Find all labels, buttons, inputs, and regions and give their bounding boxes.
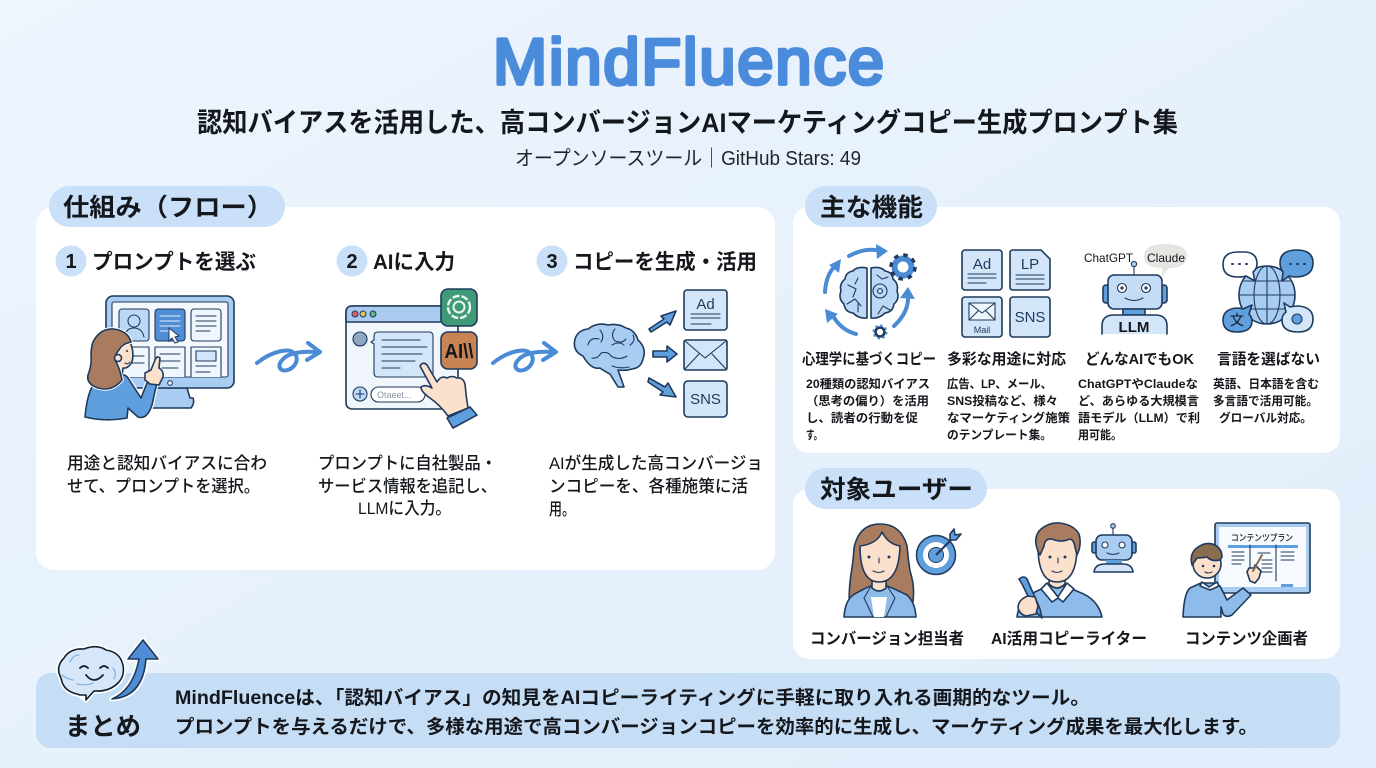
icon: planner with board: [1183, 523, 1310, 617]
icon: marketing documents: [962, 250, 1050, 337]
step 2 description: [318, 454, 497, 518]
feature 2 description: のテンプレート集。: [947, 427, 1052, 442]
step 2 heading: [336, 246, 455, 276]
summary text: [175, 686, 1258, 738]
summary label: まとめ: [65, 713, 141, 741]
feature 4 description: [1213, 376, 1319, 425]
feature 4 description: グローバル対応。: [1219, 410, 1312, 425]
step 3 description: AIが生成した高コンバージョ: [549, 453, 763, 473]
icon: AI chat window: AI\\: [444, 341, 474, 363]
heading: features: [805, 186, 937, 227]
icon: planner with board: コンテンツプラン: [1231, 533, 1293, 543]
step 3 description: 用。: [549, 500, 575, 519]
heading: flow: [49, 186, 285, 227]
feature 2 description: SNS投稿など、様々: [947, 393, 1058, 408]
icon: LLM robot: [1084, 244, 1187, 336]
icon: brain with arrow: [59, 640, 158, 700]
step 3 heading: コピーを生成・活用: [573, 250, 757, 274]
step 3 heading: 3: [546, 251, 558, 273]
feature 2 description: なマーケティング施策: [947, 410, 1070, 425]
icon: brain with outputs: Ad: [696, 296, 715, 313]
step 2 heading: 2: [346, 251, 358, 273]
feature 3 description: ど、あらゆる大規模言: [1078, 393, 1199, 408]
feature 3 description: ChatGPTやClaudeな: [1078, 377, 1198, 391]
title: MindFluence: [493, 25, 884, 98]
step 1 description: せて、プロンプトを選択。: [67, 477, 260, 496]
icon: marketing documents: Mail: [974, 325, 990, 335]
heading: target users: [805, 468, 987, 509]
tagline: オープンソースツール｜GitHub Stars: 49: [515, 147, 861, 170]
feature 1 description: （思考の偏り）を活用: [806, 393, 929, 408]
feature 1 description: す。: [806, 428, 822, 442]
icon: globe with speech bubbles: [1223, 250, 1313, 332]
feature 3 description: [1078, 377, 1200, 442]
step 1 heading: [56, 246, 256, 276]
step 3 description: ンコピーを、各種施策に活: [549, 477, 748, 496]
feature 2 title: 多彩な用途に対応: [947, 350, 1066, 368]
feature 1 description: し、読者の行動を促: [806, 410, 918, 425]
step 1 description: 用途と認知バイアスに合わ: [67, 454, 267, 473]
step 1 heading: 1: [65, 251, 77, 273]
feature 4 description: 多言語で活用可能。: [1213, 393, 1318, 408]
feature 1 title: 心理学に基づくコピー: [802, 350, 936, 368]
feature 1 description: [806, 376, 930, 442]
icon: brain cycle: [825, 244, 915, 338]
summary text: プロンプトを与えるだけで、多様な用途で高コンバージョンコピーを効率的に生成し、マーケティング成果を最大化します。: [175, 715, 1258, 738]
icon: marketing documents: Ad: [973, 256, 991, 273]
icon: brain with outputs: SNS: [690, 391, 721, 408]
heading: flow: 仕組み（フロー）: [63, 194, 273, 222]
step 2 description: LLMに入力。: [358, 499, 451, 518]
summary text: MindFluenceは、「認知バイアス」の知見をAIコピーライティングに手軽に取り入れる画期的なツール。: [175, 686, 1090, 709]
subtitle: 認知バイアスを活用した、高コンバージョンAIマーケティングコピー生成プロンプト集: [197, 107, 1178, 138]
step 2 description: プロンプトに自社製品・: [318, 454, 497, 473]
feature 4 description: 英語、日本語を含む: [1213, 376, 1319, 391]
feature 4 title: 言語を選ばない: [1217, 351, 1320, 368]
feature 1 description: 20種類の認知バイアス: [806, 376, 930, 391]
feature 3 description: 用可能。: [1078, 427, 1122, 442]
arrow: step 1 to 2: [257, 343, 320, 371]
icon: brain with outputs: [574, 290, 727, 417]
heading: features: 主な機能: [820, 194, 923, 222]
user label 3: コンテンツ企画者: [1185, 629, 1308, 648]
panel: summary: [36, 640, 1340, 748]
icon: LLM robot: Claude: [1147, 251, 1185, 265]
icon: LLM robot: LLM: [1118, 319, 1150, 336]
panel: flow: [36, 186, 775, 570]
feature 2 description: 広告、LP、メール、: [947, 376, 1052, 391]
user label 2: AI活用コピーライター: [991, 630, 1147, 648]
icon: LLM robot: ChatGPT: [1084, 251, 1134, 265]
icon: globe with speech bubbles: 文: [1230, 312, 1244, 328]
step 2 heading: AIに入力: [373, 251, 455, 274]
step 3 heading: [536, 246, 757, 276]
feature 2 description: [947, 376, 1070, 442]
step 2 description: サービス情報を追記し、: [318, 477, 497, 496]
icon: marketing documents: SNS: [1015, 309, 1045, 326]
icon: marketing documents: LP: [1021, 256, 1039, 273]
user label 1: コンバージョン担当者: [810, 630, 964, 648]
icon: AI chat window: Otaeet...: [377, 390, 412, 400]
step 1 description: [67, 454, 267, 496]
heading: target users: 対象ユーザー: [820, 476, 973, 504]
panel: features: [793, 186, 1340, 453]
step 1 heading: プロンプトを選ぶ: [92, 251, 256, 274]
step 3 description: [549, 453, 763, 519]
icon: monitor with person: [85, 296, 234, 420]
panel: target users: [793, 468, 1340, 659]
icon: copywriter with robot: [1017, 523, 1136, 618]
feature 3 title: どんなAIでもOK: [1085, 351, 1194, 368]
icon: marketer with target: [844, 524, 961, 617]
icon: AI chat window: [346, 289, 477, 428]
feature 3 description: 語モデル（LLM）で利: [1078, 410, 1200, 425]
arrow: step 2 to 3: [493, 343, 556, 371]
